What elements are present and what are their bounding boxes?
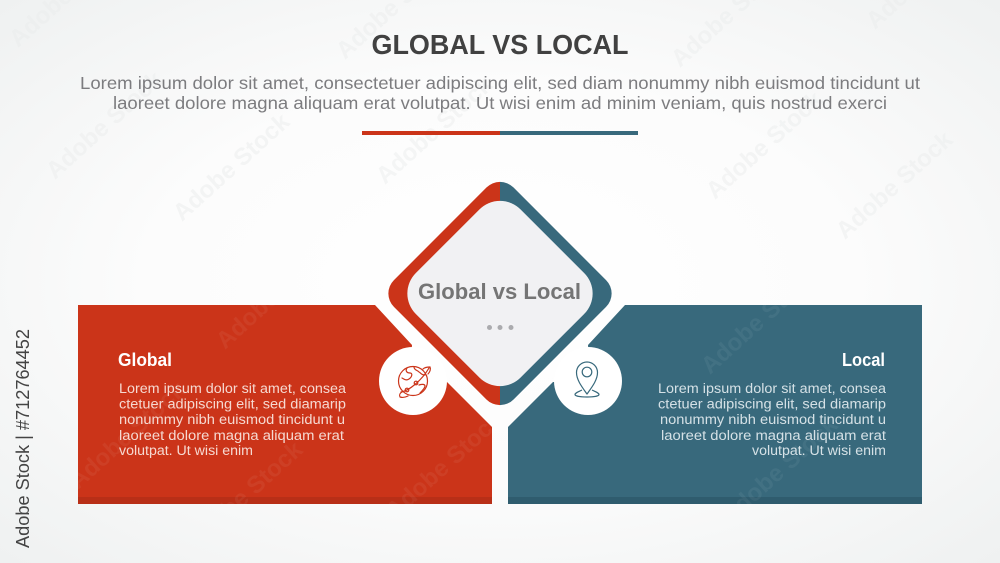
text: Adobe Stock: [181, 436, 309, 554]
text block: local: Lorem ipsum dolor sit amet, consea: [658, 381, 887, 396]
text: Adobe Stock: [64, 376, 192, 494]
text block: local: laoreet dolore magna aliquam erat: [661, 428, 886, 443]
text block: local: nonummy nibh euismod tincidunt u: [660, 412, 886, 427]
text block: global: Lorem ipsum dolor sit amet, consea: [119, 381, 347, 396]
text: Adobe Stock: [831, 126, 959, 244]
text block: global: ctetuer adipiscing elit, sed diamarip: [119, 396, 346, 412]
text: Adobe Stock: [696, 261, 824, 379]
title: GLOBAL VS LOCAL: [372, 29, 628, 60]
text: Adobe Stock: [716, 411, 844, 529]
subtitle text block: laoreet dolore magna aliquam erat volutpat. Ut wisi enim ad minim veniam, quis nostrud exerci: [113, 93, 887, 113]
panel: local: [508, 305, 922, 504]
text block: local: volutpat. Ut wisi enim: [752, 443, 886, 458]
icon: map pin: [575, 362, 599, 397]
text: Adobe Stock: [41, 66, 169, 184]
central diamond: [388, 182, 612, 406]
diamond inner panel: [395, 189, 605, 398]
icon badge: global: [379, 347, 447, 415]
subtitle text block: [80, 73, 920, 113]
heading: local: Local: [842, 350, 885, 370]
icon: globe: [398, 366, 430, 397]
icon badge: local: [554, 347, 622, 415]
text block: local: ctetuer adipiscing elit, sed diamarip: [658, 396, 886, 412]
text block: local: [658, 381, 887, 458]
panel: global: [78, 305, 492, 504]
text: Adobe Stock: [168, 108, 296, 226]
text: Adobe Stock: [211, 236, 339, 354]
heading: global: Global: [118, 350, 172, 370]
text: Adobe Stock: [381, 406, 509, 524]
vertical stock credit: Adobe Stock | #712764452: [13, 329, 33, 548]
text: Adobe Stock: [371, 71, 499, 189]
text block: global: [119, 381, 347, 458]
text block: global: volutpat. Ut wisi enim: [119, 443, 253, 458]
subtitle text block: Lorem ipsum dolor sit amet, consectetuer adipiscing elit, sed diam nonummy nibh euismod tincidunt ut: [80, 73, 920, 93]
diamond label: Global vs Local: [418, 279, 581, 304]
text: Adobe Stock: [701, 86, 829, 204]
title divider bar: [362, 131, 638, 135]
ellipsis dots: [487, 325, 514, 330]
text block: global: nonummy nibh euismod tincidunt u: [119, 412, 345, 427]
text block: global: laoreet dolore magna aliquam erat: [119, 428, 344, 443]
